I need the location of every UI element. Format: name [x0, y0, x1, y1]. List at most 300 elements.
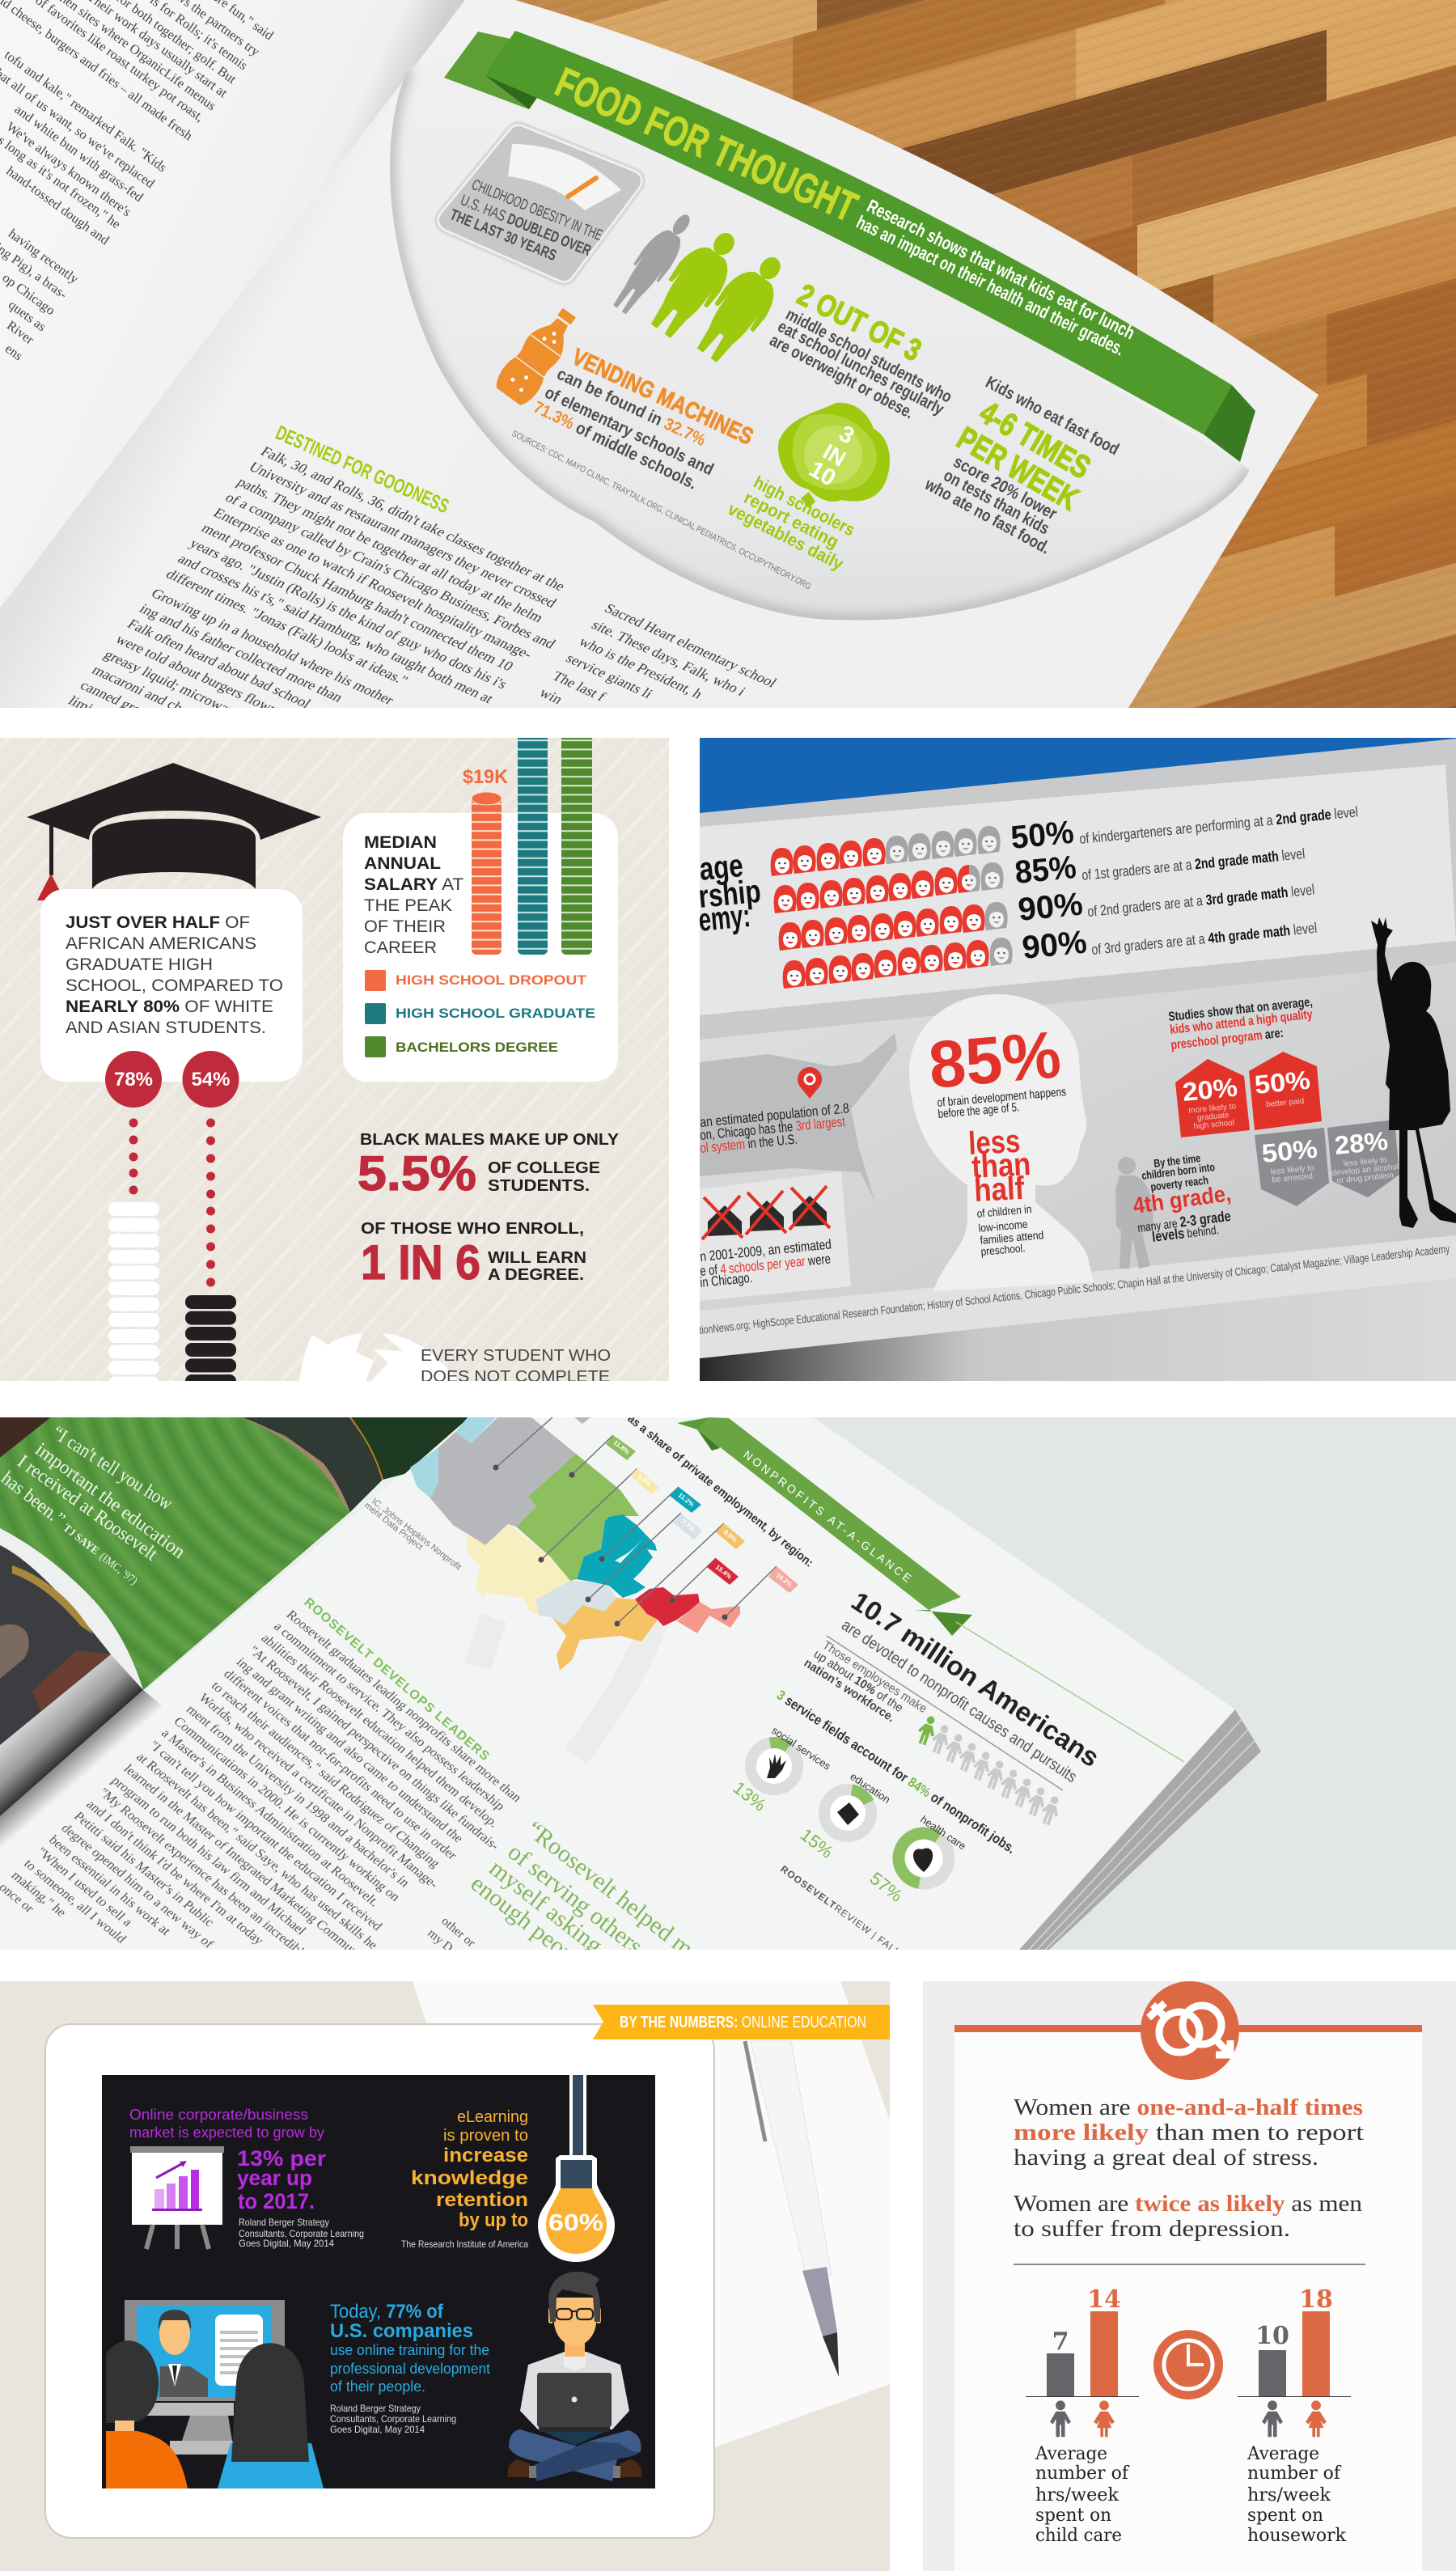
stat: vending machines	[531, 344, 757, 493]
article body: to reach their audiences," said Rodriguez of Changing	[208, 1679, 443, 1870]
head profile with brain stat: low-income	[978, 1218, 1028, 1235]
stat: 1 in 6: A DEGREE.	[488, 1266, 584, 1284]
legend: BACHELORS DEGREE	[396, 1040, 558, 1055]
gray semicircle background	[390, 31, 1250, 621]
label: housework	[1246, 2444, 1347, 2546]
desk background	[0, 1981, 890, 2571]
article body column one: University and as restaurant managers they never crossed	[246, 459, 560, 611]
wood floor background	[0, 0, 1456, 708]
badge: 20%: graduate	[1197, 1111, 1230, 1123]
panel: nonprofits at a glance	[0, 1412, 1456, 2092]
badge: 50% better paid	[1249, 1052, 1322, 1130]
stat rows: of 1st graders are at a 2nd grade math level	[1081, 845, 1306, 883]
panel: women and stress	[923, 1981, 1456, 2571]
map source note: ment Data Project	[362, 1501, 425, 1552]
chart: coin stacks	[463, 728, 592, 955]
article body column one: limi	[66, 693, 96, 715]
right page gutter shading	[0, 1690, 166, 1849]
text: stress: more likely than men to report	[1014, 2120, 1364, 2145]
article body: ing and grant writing and also came to understand the	[233, 1654, 467, 1845]
banner: by the numbers	[593, 2005, 890, 2039]
chart: housework hours	[1238, 2285, 1351, 2437]
text: depression: Women are twice as likely as men	[1014, 2191, 1363, 2217]
stat: fast food 4-6 times: Kids who eat fast food	[983, 373, 1122, 459]
stat: 10.7 million Americans: up about 10% of the	[811, 1647, 905, 1715]
article body: making," he	[8, 1868, 70, 1919]
chart: child care hours	[1026, 2285, 1139, 2437]
viewer right	[218, 2343, 324, 2488]
label: child care: Average	[1035, 2444, 1107, 2464]
donut: health care: health care	[918, 1813, 968, 1852]
chart: white students 78%	[105, 1051, 162, 1391]
stat: black males 5.5%: STUDENTS.	[488, 1177, 590, 1195]
stat: black males 5.5%: OF COLLEGE	[488, 1159, 600, 1177]
head profile with brain stat: less	[967, 1124, 1021, 1162]
article heading: DESTINED FOR GOODNESS	[273, 421, 452, 518]
tablet screen	[102, 2075, 655, 2488]
callout: median annual salary: SALARY AT	[364, 875, 463, 894]
text: stress: Women are one-and-a-half times	[1014, 2094, 1363, 2120]
text: 4th grade: children born into	[1141, 1160, 1216, 1182]
stat rows	[1009, 803, 1359, 966]
article body column two: The last f	[549, 668, 609, 704]
article body: been essential in his work at	[46, 1832, 175, 1938]
footer band	[700, 1235, 1456, 1358]
callout: median annual salary: THE PEAK	[364, 896, 452, 915]
wall background	[0, 1417, 1456, 1950]
badge: 28%: less likely to	[1343, 1155, 1388, 1169]
donut: education	[797, 1770, 892, 1862]
map: United States: ol system in the U.S.	[700, 1131, 798, 1156]
label: child care: number of	[1035, 2463, 1130, 2484]
badge: 20%: more likely to	[1188, 1102, 1237, 1116]
text: elearning knowledge retention: by up to	[459, 2209, 528, 2231]
callout: school closings	[700, 1171, 851, 1301]
article body: different voices that not-for-profits need to use in order	[221, 1667, 461, 1862]
head profile with brain stat: families attend	[980, 1228, 1044, 1247]
gauge: childhood obesity scale	[447, 136, 631, 271]
ribbon: food for thought	[444, 31, 1255, 462]
stat: 10.7 million Americans: nation's workforce.	[802, 1656, 897, 1725]
white card	[954, 2029, 1422, 2571]
icon: gender symbols	[1141, 1981, 1239, 2080]
text: 4th grade: By the time	[1153, 1151, 1201, 1170]
badge: 20%: 20%	[1181, 1073, 1238, 1107]
badge: 50% less likely arrested	[1255, 1128, 1329, 1206]
head profile with brain stat: preschool.	[980, 1241, 1026, 1258]
source note: Goes Digital, May 2014	[239, 2238, 334, 2249]
pull quote on photo: has been.” TJ SAYE (IMC, '97)	[0, 1468, 144, 1589]
icon: small child silhouette	[1115, 1157, 1153, 1269]
green pull quote: “Roosevelt helped me	[522, 1816, 707, 1969]
badge: 50% better paid: 50%	[1253, 1065, 1311, 1099]
article body: Roosevelt graduates leading nonprofits share more than	[283, 1607, 525, 1805]
gauge: childhood obesity scale: CHILDHOOD OBESITY IN THE	[469, 176, 604, 244]
stat: black males 5.5%	[358, 1131, 620, 1201]
green pull quote: myself asking e	[485, 1855, 620, 1969]
map pins and flags: 8.6%	[722, 1528, 739, 1544]
donut: social services	[730, 1724, 833, 1815]
stat: 13% per year: to 2017.	[238, 2189, 315, 2213]
icon: presentation board	[130, 2146, 224, 2249]
legend: HIGH SCHOOL GRADUATE	[396, 1006, 595, 1021]
callout: just over half: SCHOOL, COMPARED TO	[66, 976, 283, 995]
left page	[0, 0, 469, 608]
text: stress: having a great deal of stress.	[1014, 2145, 1318, 2171]
head profile with brain stat	[909, 994, 1094, 1291]
stat: 2 out of 3: 2 OUT OF 3	[792, 278, 926, 368]
left page text	[0, 0, 277, 363]
stat: 13% per year: 13% per	[237, 2146, 327, 2171]
article body: program to run both his law firm and Michael	[108, 1773, 310, 1938]
article body: "My Roosevelt experience has been an incredible	[95, 1785, 312, 1962]
stat rows: 90%	[1021, 924, 1088, 966]
photo: green field	[0, 1417, 469, 1745]
article body: Communications in 2000. He is currently working on	[171, 1714, 404, 1904]
right page	[0, 1417, 1261, 1950]
article body: ment from the University in 1998 and a bachelor's in	[184, 1702, 413, 1890]
label: child care	[1035, 2444, 1130, 2546]
stat: fast food 4-6 times: 4-6 TIMES	[974, 395, 1096, 486]
article body: "When I used to sell a	[33, 1845, 137, 1929]
article body: learned in the Master of Integrated Marketing Communi-	[121, 1761, 369, 1963]
article body column one: ment professor Chuck Hamburg hadn't connected them 10	[198, 520, 517, 674]
stat: fast food 4-6 times: PER WEEK	[951, 421, 1085, 518]
article body: to someone, all I would	[21, 1856, 130, 1946]
label: housework: number of	[1247, 2463, 1342, 2484]
text: 4th grade: poverty reach	[1149, 1173, 1209, 1193]
stat: vegetables: report eating	[741, 487, 842, 553]
callout: median annual salary	[343, 728, 618, 1082]
stat: 1 in 6: WILL EARN	[488, 1249, 586, 1267]
text: elearning knowledge retention: eLearning	[457, 2108, 528, 2126]
stat: 10.7 million Americans: Those employees make	[820, 1638, 929, 1716]
panel: food for thought magazine	[0, 0, 1456, 708]
chart: african american students 54%: 54%	[191, 1069, 231, 1091]
text: studies show: kids who attend a high quality	[1170, 1008, 1313, 1037]
article body column one: years ago. "Justin (Rolls) is the kind of guy who dots his i's	[186, 536, 510, 693]
banner: by the numbers: BY THE NUMBERS: ONLINE EDUCATION	[620, 2014, 866, 2031]
stat: 2 out of 3: are overweight or obese.	[767, 331, 916, 422]
callout: just over half: JUST OVER HALF OF	[66, 913, 250, 932]
label: housework: spent on	[1247, 2505, 1323, 2526]
upper light area	[700, 765, 1456, 1015]
article body column one: ing and his father collected more than	[136, 601, 346, 705]
text: elearning knowledge retention: retention	[436, 2189, 528, 2211]
article body column one: Growing up in a household where his mother	[148, 586, 397, 707]
stat rows: of 2nd graders are at a 3rd grade math level	[1086, 882, 1315, 920]
stat: black males 5.5%: BLACK MALES MAKE UP ONLY	[360, 1131, 620, 1149]
heading fragment	[697, 848, 763, 938]
icon: graduation cap	[27, 763, 321, 900]
text: 4th grade	[1132, 1151, 1233, 1245]
donut: health care: 57%	[866, 1868, 907, 1906]
article body: at Roosevelt has been," said Saye, who has used skills he	[133, 1750, 381, 1952]
source note: Roland Berger Strategy	[239, 2217, 329, 2228]
left page text: We've always known there's	[3, 119, 134, 219]
gutter shadow	[0, 1654, 143, 1816]
map pins and flags: 5.8%	[637, 1472, 653, 1488]
label: child care: hrs/week	[1035, 2485, 1120, 2505]
source note: Consultants, Corporate Learning	[239, 2228, 364, 2239]
callout: school closings: in Chicago.	[700, 1270, 753, 1290]
text: online corporate market: Online corporate/business	[129, 2106, 308, 2123]
article body column one: different times. "Jonas (Falk) looks at ideas."	[163, 566, 412, 688]
map: United States	[700, 1033, 897, 1202]
head profile with brain stat: before the age of 5.	[938, 1100, 1020, 1121]
girl silhouette reaching up	[1371, 917, 1456, 1228]
left page text: having recently	[6, 226, 82, 287]
text: 4th grade: 4th grade,	[1132, 1180, 1233, 1218]
badge: 28%: or drug problem	[1336, 1171, 1394, 1185]
article body column one: Falk, 30, and Rolls, 36, didn't take classes together at the	[258, 443, 569, 594]
article body column two: win	[536, 685, 566, 707]
stat: vending machines: VENDING MACHINES	[568, 344, 757, 451]
stat: 13% per year: year up	[237, 2166, 312, 2190]
left page text: hand-tossed dough and	[4, 163, 112, 248]
stat: 2 out of 3	[769, 285, 951, 419]
callout: just over half	[40, 889, 303, 1082]
legend: HIGH SCHOOL DROPOUT	[396, 972, 587, 988]
stat: vending machines: can be found in 32.7%	[554, 365, 709, 450]
stat: vending machines: 71.3% of middle schools.	[531, 398, 700, 493]
stat: 10.7 million Americans: are devoted to nonprofit causes and pursuits	[838, 1616, 1080, 1786]
illustration: video call	[106, 2300, 324, 2488]
stat: 2 out of 3: eat school lunches regularly	[775, 317, 947, 419]
source note	[239, 2217, 364, 2249]
stat: vegetables: high schoolers	[751, 472, 858, 540]
text: 3 service fields: 3 service fields account for 84% of nonprofit jobs.	[774, 1688, 1018, 1857]
article body: a Master's in Business Administration at Roosevelt.	[159, 1726, 383, 1909]
panel: village leadership academy	[697, 738, 1456, 1381]
stat: 1 in 6	[361, 1220, 586, 1290]
green pull quote: enough peopl	[466, 1870, 586, 1972]
stat: 1 in 6: OF THOSE WHO ENROLL,	[361, 1220, 584, 1238]
heading fragment: emy:	[697, 898, 752, 938]
head profile with brain stat: half	[973, 1171, 1026, 1209]
badge: 50% better paid: better paid	[1266, 1097, 1305, 1109]
stat rows: 85%	[1014, 849, 1078, 891]
page background swirls	[477, 1606, 659, 1756]
head profile with brain stat: 85%	[926, 1018, 1064, 1103]
folio: ROOSEVELTREVIEW | FALL 2014	[778, 1863, 925, 1975]
ribbon: nonprofits at a glance	[677, 1417, 1184, 1762]
article body: Worlds, who received a certificate in Nonprofit Manage-	[196, 1690, 442, 1891]
article body column one: were told about burgers flown	[112, 632, 281, 717]
gauge: childhood obesity scale: U.S. HAS DOUBLED OVER	[458, 192, 594, 260]
article body: and I don't think I'd be where I'm at today	[83, 1797, 268, 1948]
article body column one: canned green	[77, 677, 157, 722]
chart: housework hours: 10	[1255, 2322, 1289, 2350]
stat rows: 90%	[1017, 886, 1084, 928]
text: depression	[1014, 2191, 1363, 2242]
left page text: ens	[2, 341, 26, 363]
body fragment: other or	[438, 1914, 478, 1950]
callout: just over half: AFRICAN AMERICANS	[66, 934, 256, 953]
icon: lettuce 3 in 10: 3	[835, 421, 858, 450]
icon: broken piggy bank	[299, 1333, 459, 1382]
text: depression: to suffer from depression.	[1014, 2216, 1290, 2242]
gauge: childhood obesity scale: THE LAST 30 YEARS	[447, 206, 559, 265]
map: United States: an estimated population of 2.8	[700, 1100, 850, 1130]
icon: row of people	[914, 1713, 1064, 1828]
text: elearning knowledge retention	[401, 2108, 528, 2250]
source note: Consultants, Corporate Learning	[330, 2413, 456, 2425]
icon: soda bottle	[497, 308, 576, 405]
title: FOOD FOR THOUGHT	[548, 59, 864, 231]
stat: fast food 4-6 times: on tests than kids	[941, 466, 1052, 539]
stat: fast food 4-6 times: score 20% lower	[950, 452, 1060, 523]
illustration: man with laptop	[508, 2272, 641, 2481]
donut: social services: social services	[769, 1724, 833, 1773]
orange rule	[954, 2025, 1422, 2032]
stat rows: of 3rd graders are at a 4th grade math level	[1090, 920, 1318, 958]
callout: median annual salary: ANNUAL	[364, 854, 441, 873]
article body column one: of a company called by Crain's Chicago Business, Forbes and	[222, 489, 559, 651]
badge: 50% less likely arrested: 50%	[1260, 1134, 1318, 1168]
left page text: River	[4, 317, 37, 348]
text: online corporate market	[129, 2106, 325, 2141]
icon: clock	[1153, 2330, 1223, 2399]
left page	[0, 1417, 469, 1816]
left page text: and white bun with grass-fed	[12, 101, 146, 205]
backdrop: blue and wood	[700, 738, 1456, 1381]
donut: social services: 13%	[730, 1777, 770, 1815]
callout: median annual salary: MEDIAN	[364, 833, 437, 852]
article body column two: who is the President, h	[576, 633, 706, 701]
article body: Petitti said his Master's in Public	[71, 1809, 218, 1929]
text: studies show	[1168, 995, 1313, 1053]
text: 77% of US companies: Today, 77% of	[330, 2301, 444, 2323]
article body: a commitment to service. They also possess leadership	[271, 1619, 509, 1813]
article body column one: Falk often heard about bad school	[125, 616, 314, 711]
text: elearning knowledge retention: knowledge	[411, 2167, 528, 2189]
left page text: tofu and kale," remarked Falk. "Kids	[2, 47, 170, 175]
text: 77% of US companies	[330, 2301, 490, 2395]
text: studies show: preschool program are:	[1170, 1027, 1285, 1053]
icon: three children	[613, 214, 781, 362]
icon: light bulb 60%	[538, 2075, 615, 2262]
map pins and flags: 11.2%	[677, 1491, 696, 1508]
legend	[365, 970, 595, 1057]
text: 77% of US companies: use online training for the	[330, 2341, 489, 2358]
stat rows: of kindergarteners are performing at a 2nd grade level	[1078, 803, 1359, 847]
label: housework: hrs/week	[1247, 2485, 1331, 2505]
callout: just over half: NEARLY 80% OF WHITE	[66, 997, 273, 1016]
donut: education: 15%	[797, 1824, 837, 1862]
text: 77% of US companies: of their people.	[330, 2378, 425, 2395]
green pull quote: of serving others, to	[503, 1839, 672, 1979]
stat: vending machines: of elementary schools and	[542, 383, 717, 479]
badge: 50% less likely arrested: be arrested	[1272, 1172, 1313, 1184]
panel: online education tablet	[0, 1981, 890, 2571]
stat: 10.7 million Americans: 10.7 million Americans	[846, 1586, 1105, 1773]
article body: abilities their Roosevelt education helped them develop.	[258, 1631, 502, 1830]
callout: school closings: e of 4 schools per year were	[700, 1252, 832, 1279]
map: US regions	[410, 1417, 740, 1671]
chart: child care hours: 7	[1052, 2327, 1069, 2356]
article body: degree opened him to a new way of	[58, 1820, 218, 1951]
left page text: quets as	[6, 297, 49, 334]
tablet	[45, 2024, 714, 2538]
text: every student: DOES NOT COMPLETE	[421, 1368, 610, 1386]
notebook	[413, 1981, 890, 2448]
chart: african american students 54%	[183, 1051, 239, 1388]
article body column one: Enterprise as one to watch if Roosevelt hospitality manage-	[210, 505, 535, 662]
pull quote on photo: “I can't tell you how	[49, 1422, 176, 1514]
text: studies show: Studies show that on average,	[1168, 995, 1313, 1024]
icon: lettuce 3 in 10	[778, 403, 890, 508]
badge: 28%: 28%	[1333, 1126, 1389, 1160]
body fragment	[425, 1914, 478, 1955]
callout: just over half: GRADUATE HIGH	[66, 955, 213, 974]
source note: Goes Digital, May 2014	[330, 2424, 425, 2435]
right page	[0, 0, 1318, 708]
left page text: op Chicago	[0, 269, 58, 318]
source note	[330, 2403, 456, 2435]
article body column two: Sacred Heart elementary school	[602, 600, 780, 690]
map pins and flags: 15.4%	[714, 1563, 733, 1581]
donut: health care	[866, 1813, 968, 1906]
map source note: IC, Johns Hopkins Nonprofit	[370, 1497, 463, 1573]
icon: light bulb 60%: 60%	[548, 2210, 603, 2236]
map pins and flags	[493, 1417, 798, 1626]
map pins and flags: 16.2%	[775, 1571, 794, 1589]
chart: child care hours: 14	[1087, 2285, 1121, 2314]
heading fragment: rship	[697, 874, 763, 915]
icon: lettuce 3 in 10: 10	[805, 456, 840, 492]
ribbon subtitle: Research shows that what kids eat for lunch	[864, 195, 1138, 343]
donut: education: education	[848, 1770, 892, 1806]
article body column two: service giants li	[563, 650, 656, 701]
pen	[745, 2041, 839, 2377]
stat rows: 50%	[1009, 815, 1076, 856]
stat: 2 out of 3: middle school students who	[783, 305, 955, 407]
text: 4th grade: many are 2-3 grade	[1136, 1208, 1232, 1235]
callout: median annual salary: OF THEIR	[364, 917, 446, 936]
badge: 50% less likely arrested: less likely to	[1270, 1163, 1315, 1177]
text: 77% of US companies: U.S. companies	[330, 2320, 473, 2342]
text: elearning knowledge retention: is proven to	[443, 2127, 528, 2145]
callout: median annual salary: CAREER	[364, 938, 437, 957]
chart: housework hours: 18	[1299, 2285, 1333, 2314]
head profile with brain stat: of children in	[976, 1202, 1032, 1220]
pull quote on photo: I received at Roosevelt	[14, 1451, 162, 1565]
text: stress	[1014, 2094, 1364, 2171]
text: elearning knowledge retention: increase	[443, 2145, 528, 2167]
badge: 28%: develop an alcohol	[1331, 1163, 1399, 1178]
panel background	[923, 1981, 1456, 2571]
map pins and flags: 7.7%	[680, 1518, 696, 1533]
article heading: ROOSEVELT DEVELOPS LEADERS	[301, 1595, 492, 1764]
map: United States: on, Chicago has the 3rd largest	[700, 1114, 846, 1143]
stat: black males 5.5%: 5.5%	[358, 1146, 476, 1201]
text: 77% of US companies: professional development	[330, 2360, 490, 2377]
sources line: SOURCES: CDC, MAYO CLINIC, TRAYTALK.ORG, CLINICAL PEDIATRICS, OCCUPYTHEORY.ORG	[510, 429, 813, 592]
body fragment: my D	[425, 1926, 455, 1955]
badge: 20%: high school	[1193, 1119, 1234, 1131]
chart: white students 78%: 78%	[114, 1069, 153, 1091]
badge: 28%	[1327, 1120, 1399, 1197]
text: every student	[421, 1347, 611, 1386]
page stack edge	[1019, 1709, 1261, 1950]
label: housework: Average	[1246, 2444, 1319, 2464]
pull quote on photo: important the education	[31, 1439, 189, 1563]
source note: Roland Berger Strategy	[330, 2403, 421, 2414]
article body column one: paths. They might not be together at all today at the helm	[234, 474, 547, 625]
icon: lettuce 3 in 10: IN	[819, 439, 850, 472]
article body: "At Roosevelt, I gained perspective on things like fundrais-	[246, 1643, 503, 1853]
